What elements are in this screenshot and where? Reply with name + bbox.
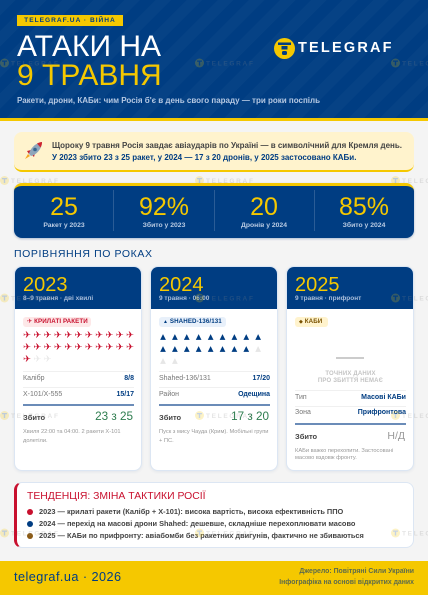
total value: 23 з 25 (95, 410, 133, 423)
missile icons: ✈ (95, 330, 103, 341)
drone icons: ▲ (255, 332, 261, 341)
row: Shahed: 17/20 (252, 375, 270, 382)
missile icons: ✈ (126, 342, 134, 353)
drone icons: ▲ (160, 344, 166, 353)
stats panel (14, 183, 414, 238)
missile icons: ✈ (33, 330, 41, 341)
subtitle: Ракети, дрони, КАБи: чим Росія б'є в день свого параду — три роки поспіль (17, 96, 320, 105)
section heading: ПОРІВНЯННЯ ПО РОКАХ (14, 248, 153, 260)
stat: 92%: 92% (139, 193, 189, 221)
missile icons: ✈ (44, 354, 52, 365)
stat: 85%: Збито у 2024 (343, 222, 385, 229)
row: Район (159, 390, 270, 398)
missile icons: ✈ (33, 342, 41, 353)
row: Зона (295, 408, 406, 416)
category tag: TELEGRAF.UA · ВІЙНА (24, 17, 116, 24)
stat: 20 drones (241, 193, 287, 229)
missile icons: ✈ (23, 342, 31, 353)
card header 2023: 8–9 травня · дві хвилі (23, 295, 93, 302)
stat: 25 rockets: Ракет у 2023 (43, 222, 85, 229)
row: Х-101: 15/17 (116, 390, 134, 398)
callout text (52, 141, 402, 162)
card header 2024: 2024 (159, 274, 204, 296)
drone icons: ▲ (243, 344, 249, 353)
missile icons: ✈ (44, 330, 52, 341)
note: Пуск з мису Чауда (Крим). Мобільні групи + ПС. (159, 429, 268, 444)
note: Хвиля 22:00 та 04:00. 2 ракети Х-101 долетіли. (23, 429, 121, 444)
missile icons: ✈ (54, 342, 62, 353)
no data placeholder: ПРО ЗБИТТЯ НЕМАЄ (318, 378, 383, 384)
missile icons: ✈ (44, 342, 52, 353)
footer site: telegraf.ua · 2026 (14, 570, 122, 584)
type tag (295, 317, 328, 326)
missile icons: ✈ (85, 342, 93, 353)
missile icons: ✈ (95, 342, 103, 353)
type tag: ▲ SHAHED-136/131 (163, 318, 222, 325)
trend item 2024: 2024 — перехід на масові дрони Shahed: дешевше, складніше перехоплювати масово (39, 519, 355, 528)
stat: 92%: Збито у 2023 (143, 222, 185, 229)
stat: 20 drones: Дронів у 2024 (241, 222, 287, 229)
trend panel (14, 482, 414, 548)
row: Тип: Тип (295, 394, 307, 401)
drone icons: ▲ (160, 356, 166, 365)
drone icons: ▲ (232, 344, 237, 353)
row: Тип: Масові КАБи (361, 394, 406, 401)
card header 2023 (15, 267, 143, 309)
missile icons: ✈ (105, 342, 113, 353)
no data placeholder: ТОЧНИХ ДАНИХ (325, 371, 376, 377)
card: 2024 (150, 266, 278, 471)
card header 2023: 2023 (23, 274, 68, 296)
drone icons: ▲ (208, 332, 213, 341)
total value: Н/Д (387, 430, 405, 442)
stat: 20 drones: 20 (250, 193, 278, 221)
row: Район: Одещина (238, 390, 270, 398)
missile icons: ✈ (85, 330, 93, 341)
icon: rocket (25, 142, 42, 159)
logo wordmark: TELEGRAF (298, 40, 394, 56)
footer source (279, 568, 414, 586)
row: Тип (295, 394, 406, 401)
stat: 85%: 85% (339, 193, 389, 221)
drone icons: ▲ (172, 332, 178, 341)
missile icons: ✈ (105, 330, 113, 341)
card: 2023 (14, 266, 142, 471)
missile icons: ✈ (64, 330, 72, 341)
missile icons: ✈ (23, 354, 31, 365)
logo: Telegraf (274, 38, 394, 59)
missile icons: ✈ (64, 342, 72, 353)
drone icons: ▲ (172, 344, 178, 353)
row: Калібр: Калібр (23, 375, 45, 382)
intro callout (14, 132, 414, 172)
drone icons: ▲ (255, 344, 261, 353)
row: Х-101: Х-101/Х-555 (23, 390, 62, 398)
row: Shahed (159, 374, 270, 382)
row: Калібр: 8/8 (124, 375, 134, 382)
drone icons: ▲ (220, 344, 225, 353)
missile icons: ✈ (23, 330, 31, 341)
row: Зона: Зона (295, 409, 311, 416)
card header 2025: 9 травня · прифронт (295, 295, 361, 302)
card: 2025 (286, 266, 414, 471)
drone icons: ▲ (208, 344, 213, 353)
missile icons: ✈ (116, 330, 124, 341)
missile icons: ✈ (75, 330, 82, 341)
total label: Збито (295, 432, 317, 441)
callout text: У 2023 збито 23 з 25 ракет, у 2024 — 17 з 20 дронів, у 2025 застосовано КАБи. (52, 152, 356, 162)
card header 2024: 9 травня · 06:00 (159, 295, 209, 302)
type tag (159, 317, 226, 326)
trend item 2023: 2023 — крилаті ракети (Калібр + Х-101): висока вартість, висока ефективність ППО (39, 507, 343, 516)
stat: 25 rockets (43, 193, 85, 229)
missile icons: ✈ (116, 342, 124, 353)
title line 1: АТАКИ НА (17, 30, 161, 63)
drone icons: ▲ (196, 344, 202, 353)
missile icons: ✈ (75, 342, 82, 353)
missile icons: ✈ (33, 354, 41, 365)
title line 2: 9 ТРАВНЯ (17, 59, 162, 92)
total value: 17 з 20 (231, 410, 269, 423)
stat: 25 rockets: 25 (50, 193, 78, 221)
row: Район: Район (159, 390, 179, 398)
row: Х-101 (23, 390, 134, 398)
note: КАБи важко перехопити. Застосовані масово вздовж фронту. (295, 448, 393, 461)
total label: Збито (159, 413, 181, 422)
drone icons: ▲ (220, 332, 225, 341)
missile icons (23, 330, 134, 365)
category tag (17, 15, 123, 26)
card header 2025: 2025 (295, 274, 340, 296)
drone icons: ▲ (232, 332, 237, 341)
card header 2024 (151, 267, 279, 309)
drone icons: ▲ (196, 332, 202, 341)
type tag: ✈ КРИЛАТІ РАКЕТИ (27, 318, 88, 325)
drone icons (160, 332, 261, 365)
no data placeholder (318, 357, 383, 384)
row: Зона: Прифронтова (358, 409, 406, 416)
row: Калібр (23, 374, 134, 382)
type tag (23, 317, 91, 326)
header banner (0, 0, 428, 121)
trend item 2025: 2025 — КАБи по прифронту: авіабомби без ракетних двигунів, фактично не збиваються (39, 531, 364, 540)
missile icons: ✈ (126, 330, 134, 341)
type tag: ◆ КАБИ (299, 318, 322, 325)
trend heading: ТЕНДЕНЦІЯ: ЗМІНА ТАКТИКИ РОСІЇ (27, 491, 206, 502)
footer (0, 561, 428, 595)
drone icons: ▲ (184, 332, 190, 341)
total label: Збито (23, 413, 45, 422)
icon: logo mark (274, 38, 295, 59)
drone icons: ▲ (172, 356, 178, 365)
callout text: Щороку 9 травня Росія завдає авіаударів по Україні — в символічний для Кремля день. (52, 141, 402, 150)
drone icons: ▲ (184, 344, 190, 353)
drone icons: ▲ (243, 332, 249, 341)
missile icons: ✈ (54, 330, 62, 341)
footer source: Джерело: Повітряні Сили України (299, 568, 414, 575)
drone icons: ▲ (160, 332, 166, 341)
footer source: Інфографіка на основі відкритих даних (279, 578, 414, 586)
card header 2025 (287, 267, 415, 309)
row: Shahed: Shahed-136/131 (159, 375, 211, 382)
